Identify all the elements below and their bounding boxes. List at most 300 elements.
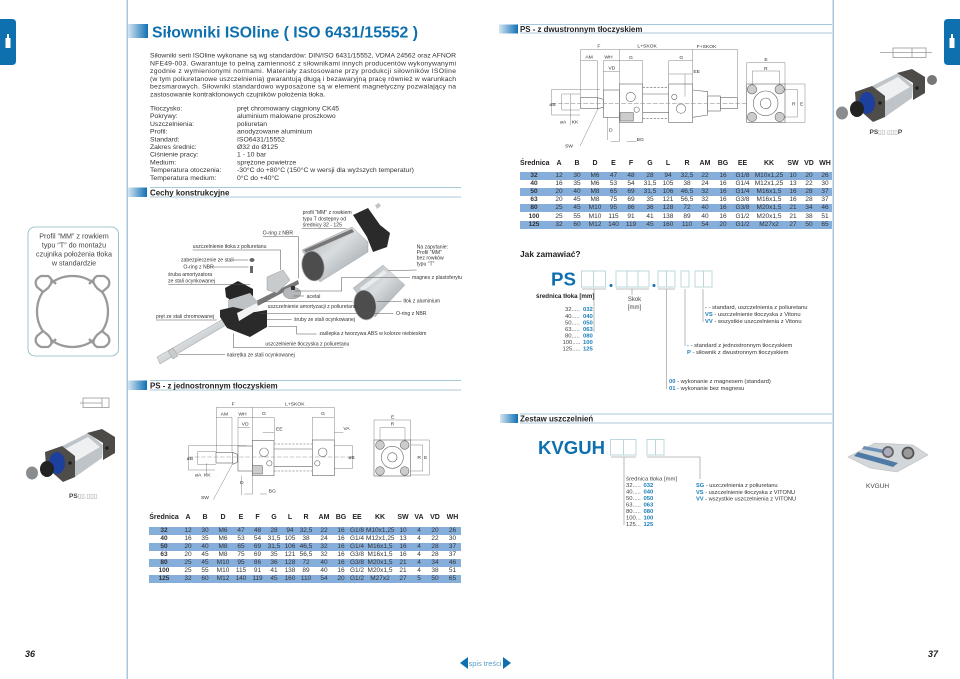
dimension labels: EE [276,427,283,433]
seal kit code: KVGUH [538,437,605,458]
panel: profile MM callout: w standardzie [51,258,96,268]
table: double rod dimensions: 21 [789,213,797,220]
seal kit: seal options [696,483,796,502]
seal kit: bore legend: 080 [644,509,654,515]
photo: single rod cylinder [26,429,115,482]
table: single rod dimensions: 32 [160,527,168,534]
table: double rod dimensions: 60 [573,221,581,228]
table: double rod dimensions: 32 [701,188,709,195]
table: single rod dimensions: 69 [254,551,261,558]
table: single rod dimensions: G1/4 [350,543,364,550]
table: single rod dimensions: 31,5 [268,543,280,550]
table: single rod dimensions: 16 [337,551,345,558]
table: single rod dimensions: 160 [285,575,295,582]
specifications list: Profil: [150,129,168,136]
dimension labels: R [792,101,796,107]
table: double rod dimensions: 89 [683,213,691,220]
table: double rod dimensions: 94 [664,172,672,179]
dimension labels: øA [195,473,202,479]
table: double rod dimensions: G1/8 [735,172,750,179]
table: double rod dimensions: 32,5 [681,172,693,179]
dimension labels: KK [572,119,579,125]
cylinder end view [374,420,429,476]
table: single rod dimensions: G1/2 [350,575,364,582]
intro text block: bezsmarowych. Siłowniki standardowo wyposażone są w element magnetyczny pozwalający na [150,84,456,91]
table: double rod dimensions: 20 [805,172,813,179]
table: double rod dimensions: G1/2 [735,221,750,228]
dimension labels: øB [187,456,194,462]
page number 37: 37 [928,649,939,659]
seal kit: bore legend: 063 [644,502,654,508]
dimension labels: BG [269,489,276,495]
table: single rod dimensions: 20 [184,543,192,550]
dimension labels: AM [221,412,228,418]
table: double rod dimensions: G1/4 [735,188,750,195]
table: single rod dimensions: 16 [337,527,345,534]
table: double rod dimensions: 46,5 [681,188,693,195]
table: single rod dimensions: 31,5 [268,535,280,542]
table: double rod dimensions: 12 [555,172,563,179]
dimension labels: G [679,55,683,61]
order code: seal options: VV - wszystkie uszczelnienia z Vitonu [705,319,802,325]
table: double rod dimensions: D [592,160,598,166]
order code: bore legend: 100 [583,340,594,346]
table: double rod dimensions: 91 [627,213,635,220]
table: double rod dimensions: 69 [627,196,635,203]
table: double rod dimensions: 40 [701,213,709,220]
order code: bore legend: 80..... [565,334,580,340]
dimension labels: øA [560,119,567,125]
table: single rod dimensions: 38 [302,535,310,542]
table: double rod dimensions: 37 [821,196,829,203]
order code: bore legend: 63..... [565,327,580,333]
table: single rod dimensions: 40 [201,543,209,550]
table: single rod dimensions: 100 [159,567,169,574]
piston rod [157,315,233,364]
table: double rod dimensions: 72 [683,204,691,211]
table: single rod dimensions: VA [414,514,424,521]
table: double rod dimensions: M12x1,25 [755,180,783,187]
table: double rod dimensions: 16 [719,180,727,187]
assembly leaders and labels [156,210,462,359]
dimension labels: F [232,402,235,408]
table: double rod dimensions: M16x1,5 [757,188,781,195]
table: single rod dimensions: 95 [237,559,245,566]
table: double rod dimensions: 95 [610,204,617,211]
table: double rod dimensions: 55 [573,213,581,220]
table: single rod dimensions: 69 [254,543,261,550]
table: single rod dimensions: 50 [160,543,168,550]
table: single rod dimensions: 30 [449,535,456,542]
table: single rod dimensions: 51 [449,567,456,574]
table: single rod dimensions: 105 [285,535,295,542]
order code: bore legend: 080 [583,334,594,340]
cylinder end view [747,63,805,122]
seal kit: bore legend: 100... [626,516,641,522]
order code: bore legend [536,293,594,352]
dimension labels: D [240,480,244,486]
table: double rod dimensions: 119 [626,221,636,228]
table: double rod dimensions: 115 [608,213,619,220]
table: double rod dimensions: 45 [646,221,654,228]
intro text block: zastosowanie kontraktonowych czujników położenia tłoka. [150,91,325,98]
order code: magnet options: 00 - wykonanie z magnesem (standard) [669,379,771,385]
order code: magnet options: 01 - wykonanie bez magnesu [669,386,744,392]
table: double rod dimensions: 32 [555,221,563,228]
table: double rod dimensions: G3/8 [735,204,750,211]
table: double rod dimensions: 21 [789,204,797,211]
table: single rod dimensions: 72 [302,559,310,566]
dimension labels: R [764,66,768,72]
table: double rod dimensions: R [684,160,690,166]
table: double rod dimensions: 40 [530,180,538,187]
table: single rod dimensions: 32 [184,575,192,582]
order code: rod options [687,343,793,356]
table: double rod dimensions: M10 [589,213,601,220]
table: single rod dimensions: 22 [320,527,328,534]
table: double rod dimensions: M16x1,5 [757,196,781,203]
table: double rod dimensions: 37 [821,188,829,195]
assembly labels: typu “T” [417,262,435,268]
table: double rod dimensions: 50 [805,221,813,228]
table: double rod dimensions: A [556,160,562,166]
order code: bore legend: 40..... [565,314,580,320]
table: double rod dimensions: 25 [555,213,563,220]
table: single rod dimensions: VD [430,514,440,521]
table: double rod dimensions: 16 [789,196,797,203]
order code: stroke label: [mm] [628,305,641,311]
table: single rod dimensions: M10 [217,559,229,566]
table: single rod dimensions: L [288,514,292,521]
table: single rod dimensions: 21 [399,567,407,574]
seal kit: bore legend: 63..... [626,502,641,508]
left chapter tab icon [0,19,16,65]
table: single rod dimensions: 30 [201,527,209,534]
table: single rod dimensions: 16 [337,567,345,574]
table: double rod dimensions: M8 [590,196,600,203]
table: single rod dimensions: 4 [417,567,421,574]
table: single rod dimensions: 45 [270,575,278,582]
table: single rod dimensions: 47 [237,527,245,534]
specifications list: sprężone powietrze [237,159,296,166]
table: single rod dimensions: B [202,514,208,521]
caption: double rod cylinder: PS▯▯.▯▯▯P [870,129,903,136]
table: single rod dimensions: 35 [270,551,278,558]
table: single rod dimensions: G1/4 [350,535,364,542]
table: single rod dimensions: 28 [431,543,439,550]
table: single rod dimensions: 37 [449,543,456,550]
table: double rod dimensions: 16 [719,188,727,195]
table: single rod dimensions: 119 [252,575,263,582]
table: single rod dimensions: 22 [431,535,439,542]
order code: bore legend: 040 [583,314,594,320]
table: single rod dimensions: G [271,514,277,521]
assembly labels: zabezpieczenie ze stali [181,257,234,263]
table: double rod dimensions: 86 [627,204,635,211]
table: double rod dimensions: 160 [663,221,673,228]
table: double rod dimensions: 80 [530,204,538,211]
panel: profile MM callout: typu “T” do montażu [42,240,106,250]
specifications list: poliuretan [237,121,267,128]
dimension labels: E [800,101,804,107]
table: double rod dimensions: 40 [701,204,709,211]
table: single rod dimensions: 80 [160,559,168,566]
dimension drawing: single rod [187,402,429,501]
table: double rod dimensions: 16 [719,204,727,211]
right page border [832,0,834,679]
table: single rod dimensions: 125 [159,575,169,582]
table: single rod dimensions: 38 [431,567,439,574]
table: single rod dimensions: 32 [320,543,328,550]
cylinder side view [188,440,353,476]
assembly labels: O-ring z NBR [396,311,427,317]
table: double rod dimensions: 36 [646,204,654,211]
order code: rod options: P - siłownik z dwustronnym tłoczyskiem [687,350,789,356]
table: double rod dimensions: 128 [663,204,673,211]
table: single rod dimensions: 53 [237,535,245,542]
seal kit: bore legend: 125 [644,522,654,528]
table: double rod dimensions: 38 [683,180,691,187]
table: double rod dimensions: 28 [646,172,654,179]
cylinder side view [552,84,747,122]
seal kit: seal options: VS - uszczelnienie tłoczyska z VITONU [696,490,795,496]
table: single rod dimensions: 16 [399,543,407,550]
table: double rod dimensions: G1/2 [735,213,750,220]
table: single rod dimensions: E [239,514,243,521]
panel: profile MM callout [28,227,118,356]
specifications list: pręt chromowany ciągniony CK45 [237,106,339,112]
specifications list: ISO6431/15552 [237,136,285,143]
intro text block [150,52,456,98]
specifications list: 1 - 10 bar [237,152,267,159]
heading: PS double rod: PS - z dwustronnym tłoczyskiem [520,25,642,34]
table: double rod dimensions: 20 [555,196,563,203]
table: double rod dimensions: 25 [555,204,563,211]
table: double rod dimensions: 106 [663,188,673,195]
table: single rod dimensions: EE [352,514,362,521]
assembly labels: Profil “MM” [417,250,442,256]
assembly labels: tłok z aluminium [403,299,440,305]
intro text block: Siłowniki serii ISOline wykonane są wg standardów: DIN/ISO 6431/15552, VDMA 24562 oraz AFNOR [150,52,456,60]
table: single rod dimensions: 46 [449,559,456,566]
table: single rod dimensions: WH [447,514,458,521]
dimension labels [187,402,428,501]
table: single rod dimensions: 37 [449,551,456,558]
table: double rod dimensions: 46 [821,204,829,211]
table: single rod dimensions: G1/8 [350,527,364,534]
assembly labels: O-ring z NBR [263,231,293,237]
heading: PS single rod: PS - z jednostronnym tłoczyskiem [150,382,278,390]
assembly labels: ze stali ocynkowanej [168,278,215,284]
large cylinder tube [299,203,390,283]
assembly labels: bez rowków [417,256,444,262]
specifications list: Temperatura otoczenia: [150,167,221,174]
table: single rod dimensions: 32 [320,551,328,558]
table: double rod dimensions: F [629,160,633,166]
table: single rod dimensions: 45 [201,559,209,566]
table: single rod dimensions: 115 [236,567,246,574]
table: double rod dimensions: 69 [627,188,635,195]
centre highlight [237,303,259,321]
table: single rod dimensions: 48 [254,527,261,534]
table: double rod dimensions: 35 [646,196,654,203]
table: single rod dimensions: 56,5 [300,551,312,558]
table: single rod dimensions: M10x1,25 [366,527,395,534]
table: double rod dimensions: G3/8 [735,196,750,203]
seal kit: bore legend: 50..... [626,496,641,502]
table: double rod dimensions: 16 [719,172,727,179]
table: single rod dimensions: SW [397,514,409,521]
order code: rod options: - - standard z jednostronnym tłoczyskiem [687,343,793,349]
leader lines [156,228,417,355]
table: single rod dimensions: M20x1,5 [368,559,392,566]
assembly labels: uszczelnienie amortyzacji z poliuretanu [268,304,357,310]
table: single rod dimensions: 34 [431,559,439,566]
table: double rod dimensions: 40 [573,188,581,195]
table: single rod dimensions: 16 [337,535,345,542]
table: double rod dimensions: 121 [663,196,673,203]
table: double rod dimensions: M10x1,25 [755,172,783,179]
assembly labels: acetal [307,294,320,300]
specifications list: Tłoczysko: [150,106,182,112]
rod nut [168,348,178,359]
table: single rod dimensions: 16 [337,559,345,566]
table: single rod dimensions: 24 [320,535,328,542]
specifications list: Zakres średnic: [150,144,197,151]
dimension drawing: double rod [549,43,805,149]
table: single rod dimensions: M12x1,25 [366,535,395,542]
table: single rod dimensions: 46,5 [300,543,312,550]
table: single rod dimensions: 55 [201,567,209,574]
table: double rod dimensions: 32 [701,196,709,203]
table: double rod dimensions: 27 [789,221,797,228]
table: double rod dimensions: 31,5 [644,188,656,195]
table: single rod dimensions: 5 [417,575,421,582]
dimension labels: EE [693,69,701,75]
specifications list: Medium: [150,159,176,166]
table: double rod dimensions: 50 [530,188,538,195]
panel: profile MM callout: Profil “MM” z rowkiem [39,232,109,240]
assembly labels: zaślepka z tworzywa ABS w kolorze niebieskim [319,331,426,337]
table: single rod dimensions: M6 [218,527,228,534]
table: double rod dimensions: 48 [627,172,635,179]
left page border [126,0,128,679]
table: single rod dimensions: G3/8 [350,559,364,566]
caption: single rod cylinder: PS▯▯.▯▯▯ [69,493,97,500]
table: single rod dimensions: M8 [218,543,228,550]
intro text block: zgodnie z wymienionymi normami. Materiały zastosowane przy produkcji siłowników ISOline [150,68,456,75]
table: double rod dimensions: 16 [719,196,727,203]
table: double rod dimensions: 47 [610,172,617,179]
dimension labels: VA [343,426,350,432]
seal kit: seal options: VV - wszystkie uszczelnienia z VITONU [696,496,796,502]
table: double rod dimensions: 38 [805,213,813,220]
table: single rod dimensions: 16 [399,551,407,558]
navigation: table of contents: spis treści [469,659,502,668]
dimension labels: G [321,411,325,417]
assembly labels: magnes z plastoferytu [412,275,462,281]
seal kit: bore legend: średnica tłoka [mm] [626,476,677,482]
dimension labels: L+SKOK [285,402,305,408]
table: single rod dimensions: M16x1,5 [368,551,392,558]
small cylinder tube [351,265,405,322]
table: single rod dimensions: F [255,514,260,521]
table: single rod dimensions: G3/8 [350,551,364,558]
heading: Cechy konstrukcyjne [128,187,461,198]
grey centre section [228,293,258,318]
table: single rod dimensions: 75 [237,551,245,558]
table: single rod dimensions: BG [336,514,346,521]
table: double rod dimensions: 65 [821,221,829,228]
seal kit: bore legend: 40..... [626,490,641,496]
table: double rod dimensions: 35 [573,180,581,187]
assembly labels: śruby ze stali ocynkowanej [294,317,355,323]
table: double rod dimensions: 45 [573,204,581,211]
table: single rod dimensions: 4 [417,527,421,534]
table: single rod dimensions: 40 [160,535,168,542]
assembly labels: uszczelnienie tłoka z poliuretanu [193,244,267,250]
order code: seal options: - - standard, uszczelnienia z poliuretanu [705,305,807,311]
table: double rod dimensions: 20 [719,221,727,228]
photo: seal kit [848,443,928,472]
assembly labels: typu T dostępny od [303,216,346,222]
table: single rod dimensions: M27x2 [370,575,390,582]
assembly labels: nakrętka ze stali ocynkowanej [227,353,295,359]
table: single rod dimensions: 16 [184,535,192,542]
table: double rod dimensions: M6 [590,172,600,179]
table: double rod dimensions: 16 [719,213,727,220]
order code: PS [551,268,712,389]
table: double rod dimensions: Średnica [520,160,550,166]
dimension labels: L+SKOK [637,43,658,49]
table: double rod dimensions: G [647,160,653,166]
heading: Cechy konstrukcyjne: Cechy konstrukcyjne [150,188,230,198]
table: single rod dimensions: M16x1,5 [368,543,392,550]
table: double rod dimensions: M27x2 [759,221,779,228]
table: single rod dimensions: 45 [201,551,209,558]
table: double rod dimensions: 65 [610,188,617,195]
assembly labels: O-ring z NBR [183,265,214,271]
table: single rod dimensions: 28 [270,527,278,534]
specifications list [150,106,414,182]
seal kit: bore legend: 032 [644,483,654,489]
dimension labels: E [424,455,428,461]
seal kit: bore legend: 040 [644,490,654,496]
dimension labels: øB [549,102,556,108]
specifications list: Pokrywy: [150,113,178,120]
table: single rod dimensions: 16 [337,543,345,550]
table: single rod dimensions: 4 [417,559,421,566]
seal kit: bore legend: 050 [644,496,654,502]
dimension labels: BG [637,137,644,143]
assembly labels: profil “MM” z rowkiem [303,210,352,216]
table: single rod dimensions: 25 [184,567,192,574]
dimension labels: øB [348,455,355,461]
dimension labels: R [391,422,395,428]
heading: seal kit: Zestaw uszczelnień [520,414,593,424]
specifications list: Temperatura medium: [150,175,217,182]
photo: double rod cylinder [836,69,937,122]
table: double rod dimensions: BG [718,160,728,166]
table: double rod dimensions: 53 [610,180,617,187]
table: double rod dimensions: M20x1,5 [757,204,781,211]
table: double rod dimensions: 20 [555,188,563,195]
dimension lines [552,49,737,146]
table: double rod dimensions: 51 [821,213,829,220]
dimension labels: E [391,414,395,420]
table: single rod dimensions: 27 [399,575,407,582]
dimension labels: WH [238,412,247,418]
